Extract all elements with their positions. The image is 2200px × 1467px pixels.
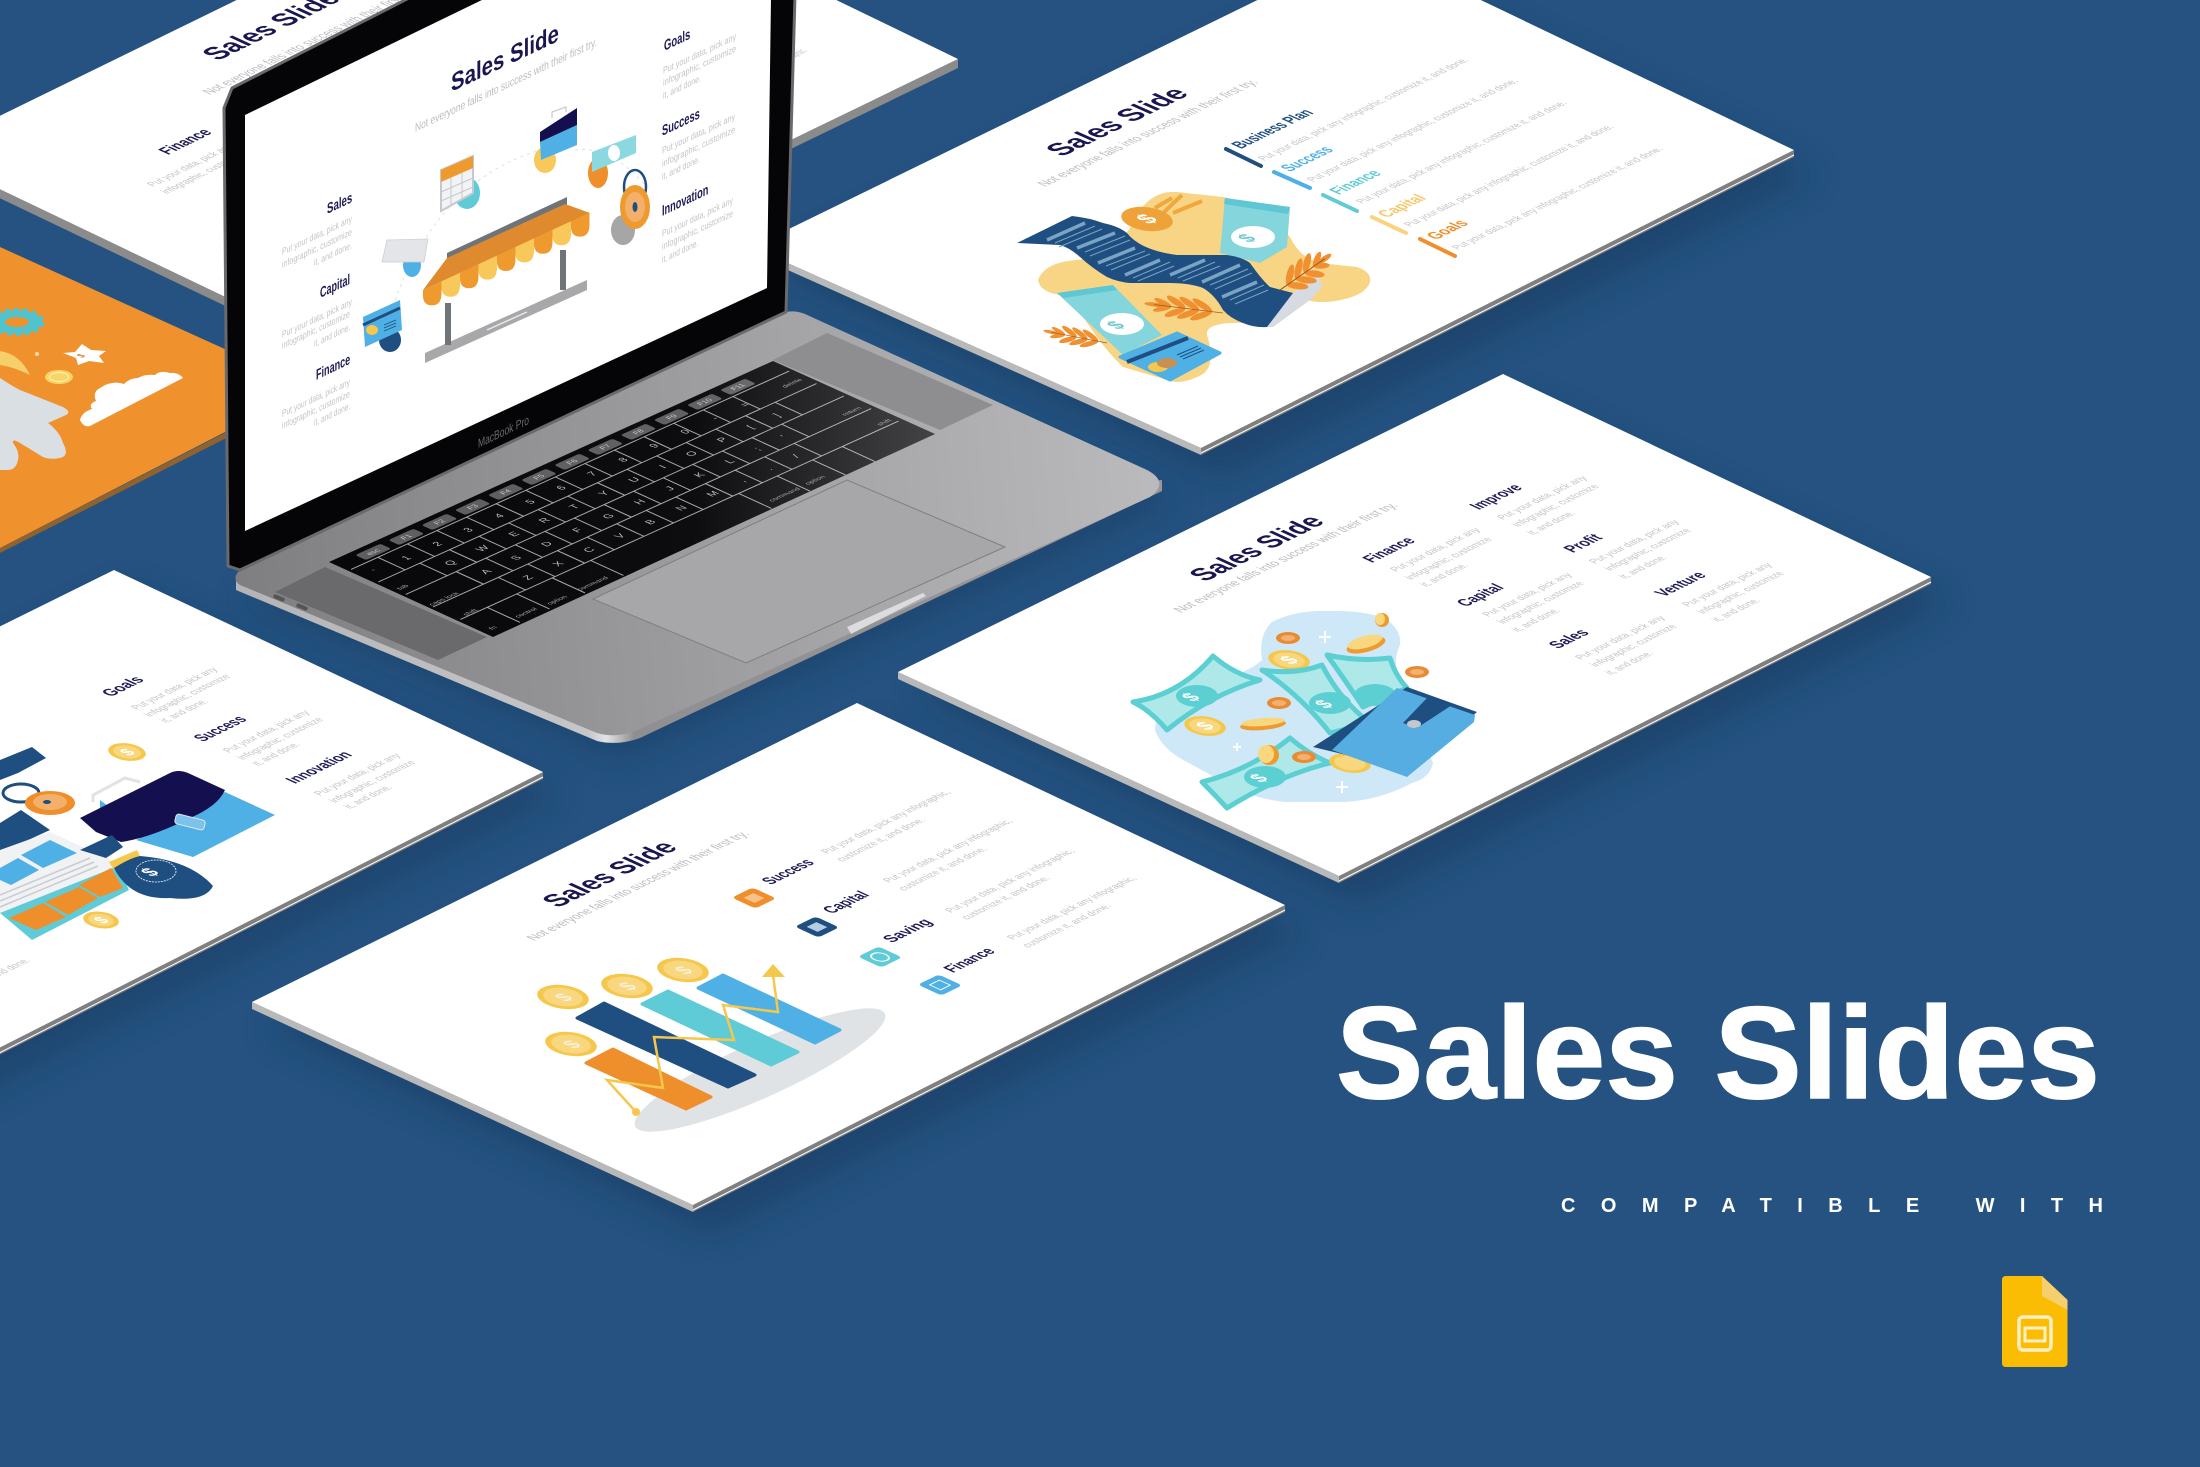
panel: lock and briefcase slide (left) [0,570,543,1086]
illustration: wallet with money [1133,611,1477,808]
icon: coins: $ [90,915,114,926]
item: success: Success [662,105,700,139]
icon: padlock [611,170,650,245]
subtitle: Not everyone falls into success with their first try. [1034,78,1262,188]
subtitle: Not everyone falls into success with their first try. [1170,501,1402,614]
list: capital: Capital [819,889,874,916]
front notch [847,593,926,634]
icon: coin 1 [527,980,599,1014]
icon: money bag [80,835,213,899]
item: capital [1453,571,1588,633]
item: finance [145,127,249,195]
shadow: laptop [240,340,1180,760]
item: improve: infographic, customize [1510,483,1603,528]
panel: orange slide [0,247,260,553]
icon: coin 3: $ [669,963,699,977]
icon: briefcase [534,107,577,173]
item: success: infographic, customize [235,716,327,761]
item: capital: Capital [1453,582,1509,609]
icon: credit card [1120,333,1220,380]
clipped text fragment: graphic. [782,47,811,61]
icon: coins [76,739,153,932]
list: success [732,789,954,908]
item: innovation [282,749,419,810]
icon: bottom bill [1057,285,1162,355]
key legends: control [514,607,540,619]
icon: coin 4: $ [557,1037,587,1051]
usb ports [273,594,308,611]
item: innovation: it, and done. [342,784,396,810]
icon: star [63,344,106,365]
icon: wallet [1313,687,1477,777]
icon: google slides [2002,1276,2068,1367]
key legends: command [768,487,803,503]
item: sales: it, and done. [314,239,352,268]
item: success: Put your data, pick any [662,110,736,156]
key outlines [351,371,931,634]
item: innovation: Innovation [282,749,357,786]
shadow: lock slide [0,590,560,1105]
key legends: option [546,595,570,606]
icon: bill left: $ [1176,690,1206,704]
rocket smoke [0,378,68,470]
item: capital: Put your data, pick any [282,296,352,340]
item: profit: it, and done. [1617,554,1671,580]
item: goals: Put your data, pick any [129,666,222,711]
key legends: command [576,576,611,592]
item: innovation: Innovation [662,181,708,219]
icon: bill bottom: $ [1244,771,1274,785]
icon: leaves [1041,241,1341,353]
key legends: tab [396,584,411,591]
icon: bill left [1133,656,1260,730]
heading: Sales Slide [1181,511,1332,585]
speaker well left [275,567,487,660]
subtitle: Not everyone falls into success with their first try. [523,829,753,942]
item: finance: Finance [1359,535,1420,565]
item: goals: Put your data, pick any [663,30,737,76]
item: finance [282,350,350,431]
arrow: trend line [607,964,785,1116]
list: success: Put your data, pick any infographic, [819,789,954,855]
list: saving [858,848,1078,967]
item: finance: Finance [155,127,217,157]
list: business plan: Business Plan [1228,107,1318,151]
item: finance: Put your data, pick any [145,143,238,188]
icon: bill centre: $ [1309,697,1339,711]
item: finance: infographic, customize [159,151,249,195]
item: success [190,709,327,767]
icon: orange coin with trail [1111,195,1202,236]
laptop base [235,311,1162,743]
item: innovation: Put your data, pick any [662,194,734,239]
icon: yellow coin [1260,646,1318,674]
icon: board with cells [0,810,129,940]
item: innovation: it, and done. [662,237,698,265]
item: profit: Put your data, pick any [1587,518,1684,565]
item: finance: it, and done. [1418,562,1472,588]
item: sales: Put your data, pick any [282,213,352,257]
item: finance [1359,526,1496,588]
icon: coins [1176,613,1429,777]
laptop lid bezel [224,0,795,570]
item: goals: infographic, customize [663,42,736,88]
illustration: briefcase, lock, money bag [0,739,275,940]
item: innovation [662,181,734,265]
item: capital: infographic, customize [282,308,350,351]
icon: coin 1: $ [549,990,579,1004]
item: capital: it, and done. [1510,607,1564,633]
icon: briefcase [80,771,225,842]
icon: crescent [0,351,30,375]
icon: receipt card [382,239,428,277]
item: success: infographic, customize [662,123,735,169]
key legends: return [841,406,864,417]
list: success: Success [758,857,819,887]
key legends [396,378,894,631]
icon: sparkles [1233,631,1348,793]
item: profit [1560,518,1695,580]
icon: coins: $ [116,747,140,758]
item: improve: it, and done. [1525,510,1579,536]
icon: coin 2: $ [613,979,643,993]
item: finance: infographic, customize [1403,536,1496,581]
keyboard [329,361,935,637]
laptop logo text: MacBook Pro [478,414,529,451]
item: sales: Put your data, pick any [1573,614,1670,661]
list: capital: customize it, and done. [896,846,991,892]
key legends: shift [462,609,480,617]
item: capital: Capital [320,270,350,301]
item: goals: it, and done. [158,698,212,724]
icon: credit card [363,300,402,352]
item: sales: infographic, customize [1588,623,1681,668]
item: venture: infographic, customize [1695,570,1788,615]
item: sales: infographic, customize [282,226,352,270]
icon: bill bottom [1202,738,1330,808]
key legends: fn [488,625,499,631]
list: finance: Finance [940,946,1000,975]
icon: coins: $ [1190,719,1220,733]
icon: dot [35,352,39,356]
icon: lock [3,784,75,815]
list: capital: Put your data, pick any infographic, [881,818,1016,884]
list: capital: Put your data, pick any infographic, customize it, and done. [1402,123,1618,228]
list: finance: customize it, and done. [1020,903,1115,949]
icon: orange coin with trail: $ [1129,211,1164,227]
key legends: option [804,475,828,486]
item: finance: infographic, customize [282,388,350,431]
icon: money bag: $ [135,865,165,879]
list: business plan: Put your data, pick any infographic, customize it, and done. [1256,57,1473,162]
item: finance: Put your data, pick any [282,376,350,419]
key legends: shift [876,419,894,427]
item: finance: it, and done. [314,400,350,428]
item: capital: it, and done. [314,321,350,349]
illustration: market stall [363,107,650,363]
list: saving: customize it, and done. [959,875,1054,921]
icon: star: $ [74,352,88,359]
bar: navy [577,1003,755,1087]
icon: money [588,135,636,188]
key legends: delete [781,378,805,389]
icon: coin 2 [591,969,663,1003]
icon: bill right [1327,655,1407,707]
panel: wallet slide (right) [898,374,1931,883]
item: success [662,105,736,182]
item: venture: it, and done. [1710,597,1764,623]
item: capital: infographic, customize [1495,580,1588,625]
item: finance: Put your data, pick any [1388,526,1485,573]
key legends: caps lock [428,591,462,607]
item: venture: Put your data, pick any [1680,561,1777,608]
icon: navy tag [0,747,46,780]
item: capital: Put your data, pick any [1480,571,1577,618]
screen [245,0,771,531]
item: success: Put your data, pick any [221,709,314,754]
item: sales: Sales [1545,627,1594,651]
item: sales [282,189,352,270]
trackpad [593,480,1005,663]
panel: finance slide (top left) [0,0,958,364]
heading: Sales Slide [451,19,559,98]
icon: blue panel [136,792,275,857]
list: finance: Put your data, pick any infographic, [1005,875,1140,941]
illustration: invoice and payment [1017,192,1370,382]
panel: chart slide (bottom) [252,703,1285,1212]
awning scallops [423,213,590,305]
icon: yellow coin: $ [1274,653,1304,667]
list: success: customize it, and done. [834,817,929,863]
list: success: Put your data, pick any infographic, customize it, and done. [1305,78,1522,183]
list: finance: Finance [1326,168,1386,197]
heading: Sales Slide [1038,83,1196,160]
list: finance: Put your data, pick any infographic, customize it, and done. [1354,100,1571,205]
list: saving: Saving [879,917,937,945]
icon: coin 3 [647,953,719,987]
list: capital [795,818,1016,937]
item: sales: it, and done. [1603,650,1657,676]
title: Sales Slides [1336,979,2100,1126]
list: success: Success [1277,144,1339,174]
subtitle: Not everyone falls into success with their first try. [415,35,597,135]
item: profit: infographic, customize [1602,527,1695,572]
list: finance [918,875,1140,995]
icon: bottom bill: $ [1101,318,1131,332]
item: sales [1545,614,1681,676]
icon: calendar [441,156,480,211]
item: goals: Goals [98,674,149,699]
item: success: it, and done. [662,153,700,182]
bar: teal [642,991,798,1065]
item: capital [282,270,352,351]
item: success: it, and done. [250,741,304,767]
shadow: chart slide [268,730,1305,1235]
icon: receipt ribbon [1017,216,1322,327]
item: success: Success [190,714,252,744]
subtitle: compatible with: COMPATIBLE WITH [1561,1195,2103,1217]
item: venture: Venture [1651,570,1711,599]
list: goals: Put your data, pick any infographic, customize it, and done. [1450,146,1667,251]
item: finance: Finance [316,350,350,383]
shadow: business slide [770,0,1815,478]
item: improve: Improve [1466,482,1527,512]
list: goals: Goals [1423,218,1474,242]
list: capital: Capital [1374,193,1431,220]
item: venture [1651,561,1788,623]
item: goals [663,25,737,101]
icon: bill centre [1262,665,1370,733]
icon: market stall [423,197,590,363]
laptop [224,0,1162,743]
icon: cloud [80,372,183,426]
speaker well right [773,333,993,430]
panel: business plan slide (top right) [752,0,1794,455]
bar: orange [586,1049,711,1109]
icon: gear [0,310,43,334]
item: improve: Put your data, pick any [1495,474,1592,521]
item: improve [1466,474,1603,536]
item: goals: Goals [664,25,690,54]
item: innovation: infographic, customize [327,759,419,804]
item: sales: Sales [327,189,352,217]
item: goals: it, and done. [663,72,701,101]
shadow: wallet slide [915,400,1950,905]
heading: Sales Slide [534,837,685,911]
icon: coin [45,370,73,384]
touch row tiles [355,379,756,560]
icon: top bill [1220,198,1290,263]
item: innovation: Put your data, pick any [312,752,405,797]
list: saving: Put your data, pick any infographic, [943,848,1078,914]
icon: top bill: $ [1232,231,1262,245]
item: profit: Profit [1560,532,1607,555]
bar chart illustration [527,953,914,1145]
item: goals: infographic, customize [142,673,234,718]
icon: coin 4 [535,1027,607,1061]
bar: blue [698,975,840,1043]
item: innovation: infographic, customize [662,207,733,252]
item: goals [98,666,234,724]
